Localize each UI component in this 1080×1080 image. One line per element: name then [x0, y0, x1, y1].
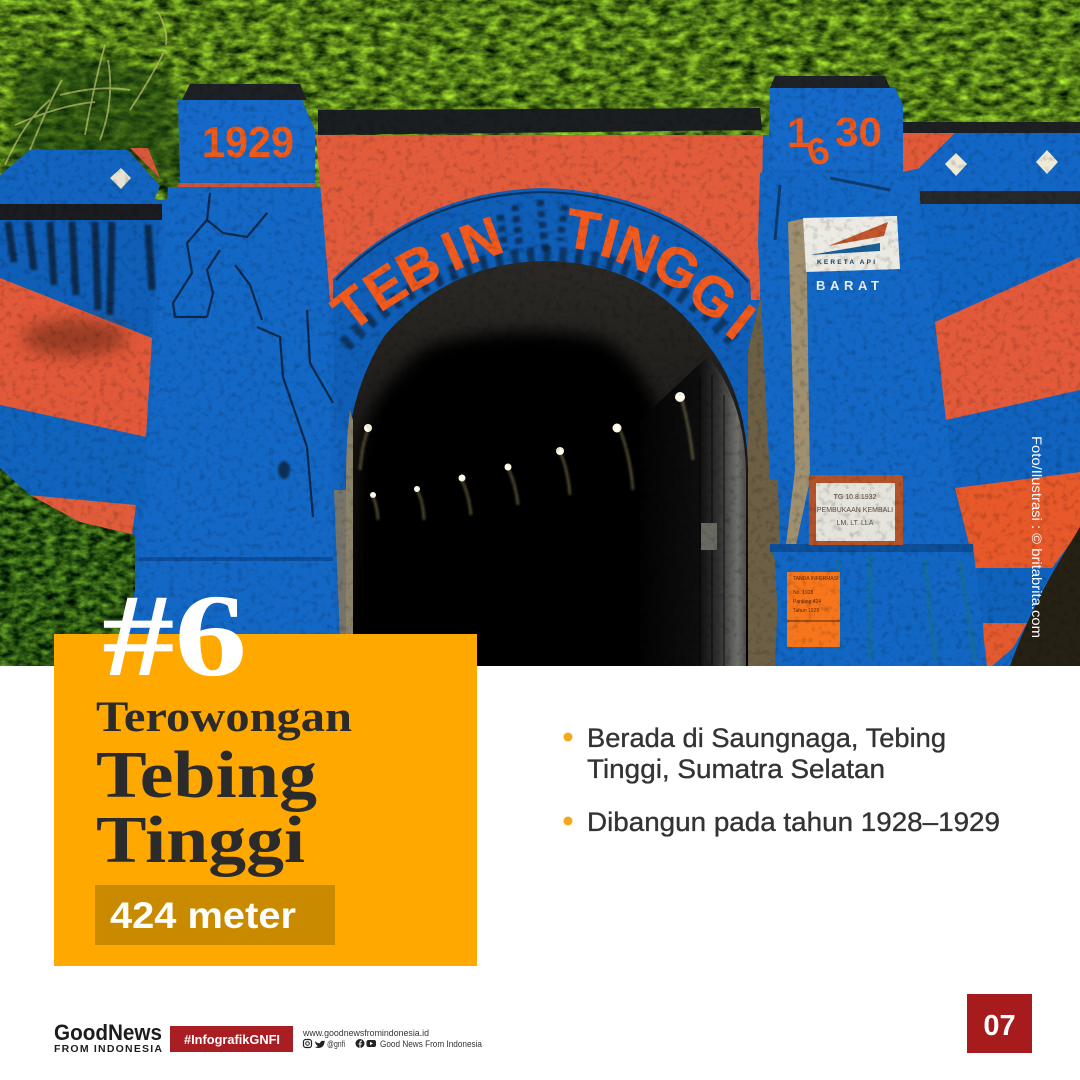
left pillar — [138, 84, 334, 561]
footer logo: GoodNews — [54, 1020, 162, 1045]
page number badge: 07 — [983, 1010, 1016, 1042]
tunnel name: TINGGI: N — [608, 213, 668, 285]
photo: Tebing Tinggi tunnel portal — [0, 0, 1080, 666]
orange notice board: No. 1928 — [793, 590, 814, 596]
railway logo sign: KERETA API — [817, 259, 875, 266]
footer logo: FROM INDONESIA — [54, 1043, 162, 1055]
tunnel name: TINGGI: T — [561, 197, 605, 263]
grass slope above the portal — [0, 0, 1080, 200]
red brick wall above arch — [316, 108, 763, 300]
date 1630 — [790, 118, 880, 164]
length badge: 424 meter — [110, 895, 296, 936]
title line 1: Terowongan — [96, 694, 352, 741]
panel: tunnel title card — [54, 570, 477, 966]
stained edge right of tunnel — [748, 300, 780, 666]
tunnel name: TINGGI — [568, 208, 756, 340]
orange notice board: Panjang 424 — [793, 599, 821, 605]
tunnel name: TEBIN: E — [353, 251, 417, 323]
title line 2: Tebing — [96, 738, 317, 812]
tunnel name: TEBIN: N — [452, 204, 510, 276]
date 1630: 30 — [835, 109, 882, 155]
tunnel opening — [334, 261, 748, 666]
door plate — [701, 523, 717, 550]
tunnel name: TEBIN: B — [386, 230, 450, 304]
tunnel name: TEBIN: T — [321, 273, 385, 343]
length badge — [95, 885, 335, 945]
rank number: #6 — [102, 570, 247, 701]
tunnel name: TINGGI: I — [716, 293, 766, 351]
footer contact details: Good News From Indonesia — [380, 1039, 482, 1049]
white plaque: TG 10.8.1932 — [834, 494, 877, 501]
date 1630: 1 — [787, 109, 810, 156]
left wall upper blue band — [0, 148, 162, 220]
footer contact details: @gnfi — [327, 1039, 345, 1049]
orange notice board — [787, 572, 840, 647]
fact: construction years: Dibangun pada tahun 1928–1929 — [587, 807, 1000, 837]
fact list — [564, 723, 1000, 837]
footer logo — [54, 1020, 162, 1055]
right wall top band — [903, 122, 1080, 204]
left bottom grass — [0, 468, 135, 666]
arch band with tunnel name — [328, 188, 756, 352]
fact: location — [564, 723, 946, 784]
left wall red stripe — [0, 278, 152, 437]
date 1630: 6 — [802, 129, 835, 176]
tunnel name: TINGGI: I — [595, 206, 625, 270]
tunnel name: TEBIN: I — [432, 220, 472, 282]
white plaque: LM. LT. LLA — [837, 520, 874, 527]
orange notice board: Tahun 1929 — [793, 608, 819, 614]
left wall lower blue stripe — [0, 405, 146, 437]
tunnel name: TINGGI: G — [678, 258, 748, 334]
left wall stained blue section — [2, 220, 157, 318]
icon: youtube — [366, 1040, 376, 1047]
tunnel lights — [360, 392, 693, 520]
right pillar — [758, 76, 987, 666]
tunnel name: TINGGI: G — [644, 230, 710, 304]
white plaque — [809, 475, 903, 545]
left wall lower red stripe — [28, 495, 136, 535]
white plaque: PEMBUKAAN KEMBALI — [817, 507, 893, 514]
date 1929: 1929 — [202, 118, 294, 167]
right wall blue and red stripes — [935, 257, 1080, 666]
icon: instagram — [304, 1040, 312, 1048]
icon: twitter — [315, 1040, 325, 1048]
tunnel name: TEBIN — [328, 216, 504, 326]
fact: location: Berada di Saungnaga, Tebing — [587, 723, 946, 753]
tunnel wall ribs — [656, 359, 746, 666]
hashtag badge — [170, 1026, 293, 1052]
BARAT label: BARAT — [816, 278, 879, 293]
title line 3: Tinggi — [96, 803, 305, 877]
page number badge — [967, 994, 1032, 1053]
photo credit: Foto/Ilustrasi : © britabrita.com — [1029, 436, 1045, 638]
footer contact details — [302, 1028, 482, 1049]
orange notice board: TANDA INFORMASI — [793, 576, 838, 582]
footer contact details: www.goodnewsfromindonesia.id — [302, 1028, 429, 1038]
fact: location: Tinggi, Sumatra Selatan — [587, 754, 885, 784]
icon: facebook — [356, 1039, 364, 1048]
hashtag badge: #InfografikGNFI — [184, 1033, 280, 1047]
wall texture overlay — [0, 0, 1080, 666]
railway logo sign — [803, 216, 900, 272]
